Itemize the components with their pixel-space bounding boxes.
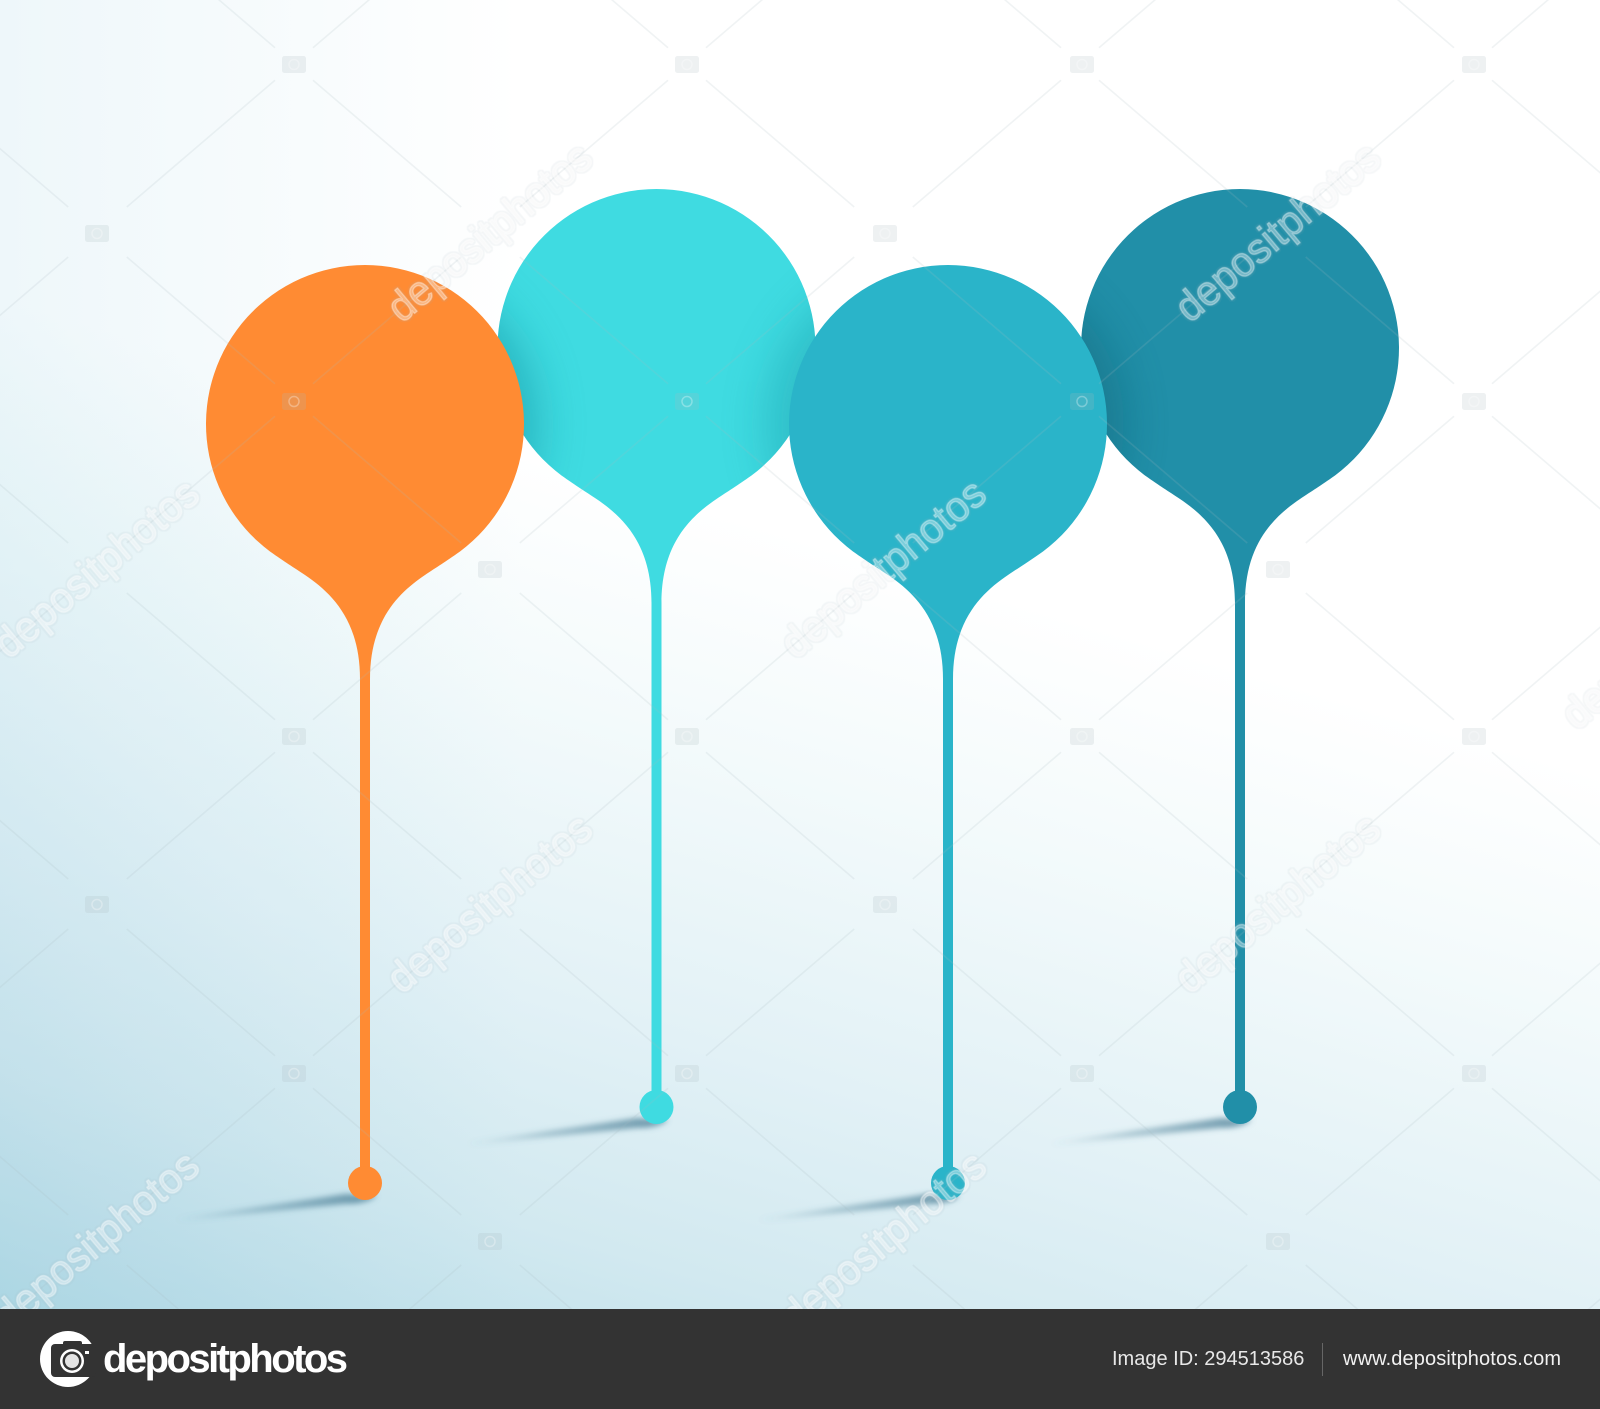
pin 2: cyan balloon (498, 189, 815, 1124)
image id: Image ID: 294513586 (1112, 1348, 1304, 1370)
watermark text repeats: depositphotos (377, 804, 601, 1002)
pin 1: orange balloon (206, 265, 524, 1200)
watermark camera icons (85, 56, 1486, 1250)
watermark text repeats: depositphotos (1165, 133, 1389, 331)
pin 3: teal balloon (789, 265, 1107, 1200)
ground shadow: orange pin (175, 1194, 377, 1221)
inner shadow from teal balloon (1081, 306, 1133, 462)
website: www.depositphotos.com (1342, 1348, 1561, 1370)
pin 4: dark teal balloon (1081, 189, 1399, 1124)
watermark text repeats: depositphotos (771, 1141, 995, 1339)
footer bar (0, 1309, 1600, 1409)
watermark text repeats: depositphotos (771, 469, 995, 667)
ground shadow: teal pin (758, 1194, 960, 1221)
inner shadow from neighbours (498, 267, 1086, 677)
watermark text repeats: depositphotos (1165, 804, 1389, 1002)
logo wordmark: depositphotos (103, 1337, 348, 1381)
watermark text repeats: depositphotos (377, 133, 601, 331)
ground shadow: dark teal pin (1050, 1118, 1252, 1145)
divider (1322, 1343, 1323, 1376)
icon: camera logo (40, 1331, 96, 1387)
ground shadow: cyan pin (466, 1118, 668, 1145)
